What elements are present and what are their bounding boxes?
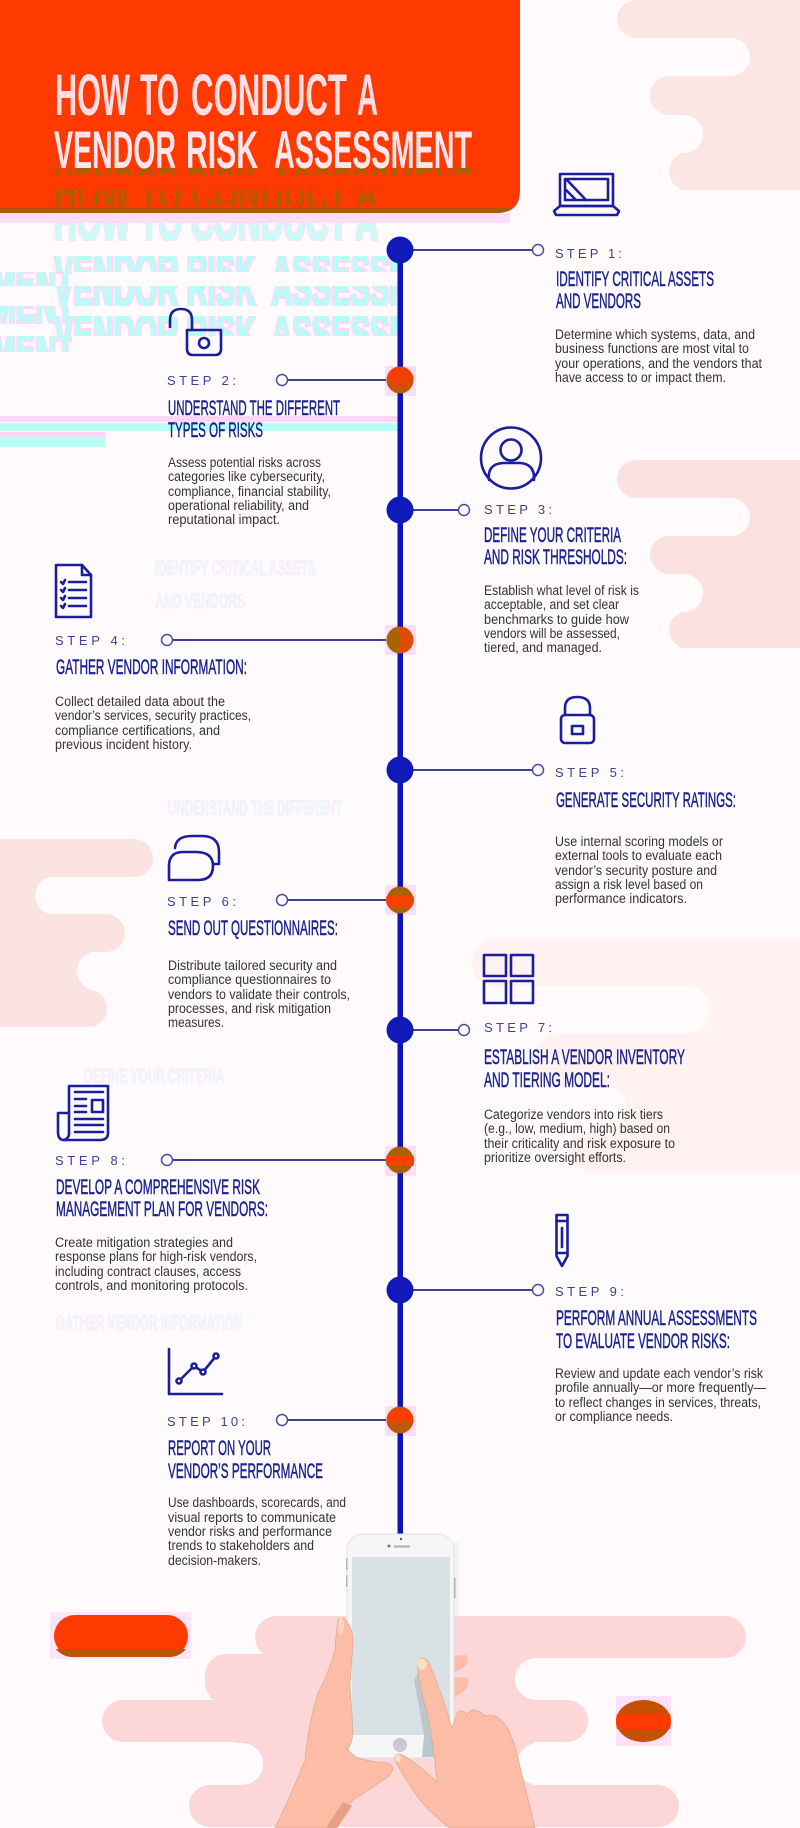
step 6 body: vendors to validate their controls, xyxy=(168,987,350,1002)
icon: newspaper xyxy=(58,1086,108,1140)
step 1 heading: AND VENDORS xyxy=(556,289,641,313)
step 4 heading: GATHER VENDOR INFORMATION: xyxy=(56,655,247,679)
step 3 body xyxy=(484,583,639,655)
step 10 body: decision-makers. xyxy=(168,1553,261,1568)
phone shadow xyxy=(454,1542,459,1616)
step 10 xyxy=(167,1349,414,1568)
step 8 body: controls, and monitoring protocols. xyxy=(55,1278,248,1293)
step 8 heading: MANAGEMENT PLAN FOR VENDORS: xyxy=(56,1197,268,1221)
title text: HOW xyxy=(55,63,130,128)
icon: line chart xyxy=(169,1349,222,1394)
step 10 heading xyxy=(168,1436,323,1483)
step 1 xyxy=(386,174,762,385)
background cloud: middle right xyxy=(617,460,800,648)
title text xyxy=(54,63,472,180)
step 2 label: STEP 2: xyxy=(167,373,236,388)
step 10 body: vendor risks and performance xyxy=(168,1524,332,1539)
step 8 heading: DEVELOP A COMPREHENSIVE RISK xyxy=(56,1175,260,1199)
step 3 body: benchmarks to guide how xyxy=(484,612,629,627)
step 2 heading xyxy=(168,396,340,442)
icon: open padlock xyxy=(170,309,221,355)
title text: ASSESSMENT xyxy=(274,121,472,180)
step 6 body: Distribute tailored security and xyxy=(168,958,337,973)
step 5 body: external tools to evaluate each xyxy=(555,848,722,863)
step 2 heading: TYPES OF RISKS xyxy=(168,418,263,442)
step 5 body: performance indicators. xyxy=(555,891,687,906)
step 3 body: tiered, and managed. xyxy=(484,640,602,655)
step 4 body: compliance certifications, and xyxy=(55,723,220,738)
step 2 body: compliance, financial stability, xyxy=(168,484,331,499)
step 4 body: previous incident history. xyxy=(55,737,192,752)
step 9 body: Review and update each vendor’s risk xyxy=(555,1366,763,1381)
step 4 xyxy=(55,565,414,752)
step 7 body: prioritize oversight efforts. xyxy=(484,1150,626,1165)
step 2 body: categories like cybersecurity, xyxy=(168,469,325,484)
decorative orange pill xyxy=(54,1615,188,1657)
step 9 body xyxy=(555,1366,766,1424)
step 9 body: profile annually—or more frequently— xyxy=(555,1380,766,1395)
left hand xyxy=(275,1617,393,1828)
step 8 body: including contract clauses, access xyxy=(55,1264,241,1279)
step 6 body xyxy=(168,958,350,1030)
title ghost artifacts: UNDERSTAND THE DIFFERENT xyxy=(168,797,342,820)
icon: laptop xyxy=(554,174,619,215)
step 6 heading: SEND OUT QUESTIONNAIRES: xyxy=(168,916,338,940)
icon: checklist document xyxy=(56,565,91,617)
step 5 label: STEP 5: xyxy=(555,765,624,780)
icon: speech bubbles xyxy=(169,836,219,880)
step 10 heading: VENDOR’S PERFORMANCE xyxy=(168,1459,323,1483)
background cloud: bottom xyxy=(102,1616,800,1827)
title text: RISK xyxy=(186,121,258,180)
step 8 label: STEP 8: xyxy=(55,1153,125,1168)
title ghost artifacts xyxy=(0,223,398,1330)
step 4 body: Collect detailed data about the xyxy=(55,694,225,709)
step 6 body: compliance questionnaires to xyxy=(168,972,331,987)
step 9 body: or compliance needs. xyxy=(555,1409,673,1424)
step 7 heading xyxy=(484,1045,685,1092)
step 2 body xyxy=(168,455,331,527)
step 5 body: assign a risk level based on xyxy=(555,877,703,892)
step 9 label: STEP 9: xyxy=(555,1284,624,1299)
step 1 label: STEP 1: xyxy=(555,246,622,261)
step 1 body: have access to or impact them. xyxy=(555,370,726,385)
phone body xyxy=(346,1534,456,1758)
step 3 body: vendors will be assessed, xyxy=(484,626,620,641)
title text: CONDUCT xyxy=(191,63,347,128)
step 8 body xyxy=(55,1235,257,1293)
step 1 body: your operations, and the vendors that xyxy=(555,356,762,371)
step 3 label: STEP 3: xyxy=(484,502,552,517)
step 6 body: processes, and risk mitigation xyxy=(168,1001,331,1016)
step 5 body: Use internal scoring models or xyxy=(555,834,723,849)
step 7 body: (e.g., low, medium, high) based on xyxy=(484,1121,670,1136)
step 2 xyxy=(167,309,414,527)
title text: TO xyxy=(140,63,179,128)
timeline spine xyxy=(398,250,403,1536)
title text: VENDOR xyxy=(54,121,176,180)
icon: four-square grid xyxy=(484,955,533,1003)
step 6 body: measures. xyxy=(168,1015,224,1030)
step 9 body: to reflect changes in services, threats, xyxy=(555,1395,761,1410)
icon: closed padlock xyxy=(561,697,594,743)
step 6 label: STEP 6: xyxy=(167,894,236,909)
background cloud: step 7 xyxy=(472,939,800,1173)
title ghost artifacts: AND VENDORS xyxy=(155,590,245,613)
step 10 body: Use dashboards, scorecards, and xyxy=(168,1495,346,1510)
step 3 heading: AND RISK THRESHOLDS: xyxy=(484,545,627,569)
step 1 body xyxy=(555,327,762,385)
step 1 body: Determine which systems, data, and xyxy=(555,327,755,342)
step 6 xyxy=(167,836,414,1030)
step 2 body: reputational impact. xyxy=(168,512,280,527)
step 7 heading: AND TIERING MODEL: xyxy=(484,1068,610,1092)
finger shadow on screen xyxy=(414,1672,436,1757)
title ghost artifacts: HOW TO CONDUCT A xyxy=(54,188,378,253)
right hand xyxy=(395,1658,535,1828)
step 2 body: operational reliability, and xyxy=(168,498,309,513)
decorative orange circle xyxy=(616,1700,671,1742)
step 10 body xyxy=(168,1495,346,1568)
title banner xyxy=(0,0,520,225)
step 3 heading: DEFINE YOUR CRITERIA xyxy=(484,523,621,547)
background cloud: left xyxy=(0,839,165,1027)
step 8 heading xyxy=(56,1175,268,1221)
step 7 body: their criticality and risk exposure to xyxy=(484,1136,675,1151)
step 10 body: trends to stakeholders and xyxy=(168,1538,314,1553)
step 10 label: STEP 10: xyxy=(167,1414,245,1429)
title ghost artifacts: GATHER VENDOR INFORMATION xyxy=(56,1312,242,1335)
step 10 heading: REPORT ON YOUR xyxy=(168,1436,271,1460)
phone held in hands xyxy=(275,1534,535,1828)
title ghost artifacts: VENDOR RISK ASSESSMENT xyxy=(54,305,472,364)
step 3 body: Establish what level of risk is xyxy=(484,583,639,598)
step 5 xyxy=(386,697,736,906)
background cloud: top right xyxy=(617,0,800,190)
title banner: VENDOR RISK ASSESSMENT xyxy=(54,157,472,216)
title banner: HOW TO CONDUCT A xyxy=(54,63,378,128)
step 8 body: response plans for high-risk vendors, xyxy=(55,1249,257,1264)
title ghost artifacts: VENDOR RISK ASSESSMENT xyxy=(54,244,472,303)
step 10 body: visual reports to communicate xyxy=(168,1510,336,1525)
step 8 xyxy=(55,1086,414,1293)
step 2 body: Assess potential risks across xyxy=(168,455,321,470)
icon: pencil xyxy=(556,1215,568,1266)
step 4 body xyxy=(55,694,251,752)
pink and cyan glitch bands xyxy=(0,213,671,1746)
title ghost artifacts: VENDOR RISK ASSESSMENT xyxy=(54,259,472,318)
step 2 heading: UNDERSTAND THE DIFFERENT xyxy=(168,396,340,420)
step 7 body xyxy=(484,1107,675,1165)
step 5 body: vendor’s security posture and xyxy=(555,863,717,878)
title ghost artifacts: IDENTIFY CRITICAL ASSETS xyxy=(155,557,316,580)
step 3 body: acceptable, and set clear xyxy=(484,597,619,612)
title text: A xyxy=(357,63,378,128)
title ghost artifacts: DEFINE YOUR CRITERIA xyxy=(84,1065,224,1088)
title banner: HOW TO CONDUCT A xyxy=(54,160,378,225)
step 7 body: Categorize vendors into risk tiers xyxy=(484,1107,663,1122)
step 1 heading xyxy=(556,267,714,313)
icon: user profile xyxy=(481,428,541,488)
step 3 xyxy=(386,428,639,655)
step 5 body xyxy=(555,834,723,906)
step 3 heading xyxy=(484,523,627,569)
step 4 label: STEP 4: xyxy=(55,633,125,648)
step 1 body: business functions are most vital to xyxy=(555,341,749,356)
step 7 xyxy=(386,955,685,1165)
step 9 xyxy=(386,1215,766,1424)
step 8 body: Create mitigation strategies and xyxy=(55,1235,233,1250)
fingers behind phone xyxy=(454,1655,469,1698)
step 7 label: STEP 7: xyxy=(484,1020,552,1035)
step 9 heading xyxy=(556,1306,757,1353)
step 4 body: vendor’s services, security practices, xyxy=(55,708,251,723)
